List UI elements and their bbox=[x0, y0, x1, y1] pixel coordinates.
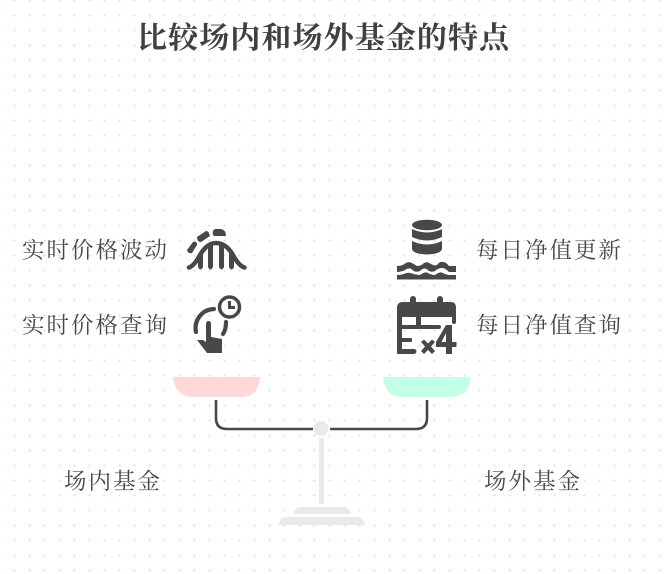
right pan bbox=[383, 377, 470, 397]
label: realtime price query: 实时价格查询 bbox=[22, 313, 169, 338]
label: off-exchange funds: 场外基金 bbox=[484, 469, 582, 494]
left pan bbox=[173, 377, 260, 397]
icon: database over water bbox=[397, 220, 456, 280]
label: daily NAV query: 每日净值查询 bbox=[476, 313, 623, 338]
scale stand bbox=[278, 421, 365, 525]
label: realtime price movement: 实时价格波动 bbox=[22, 238, 169, 263]
label: exchange-traded funds: 场内基金 bbox=[64, 469, 162, 494]
scale beam bbox=[216, 400, 427, 429]
title: 比较场内和场外基金的特点 bbox=[137, 22, 511, 55]
label: daily NAV update: 每日净值更新 bbox=[476, 238, 623, 263]
icon: touch with clock bbox=[196, 297, 240, 353]
icon: calendar times four bbox=[397, 296, 456, 354]
icon: price wave bbox=[187, 229, 244, 270]
